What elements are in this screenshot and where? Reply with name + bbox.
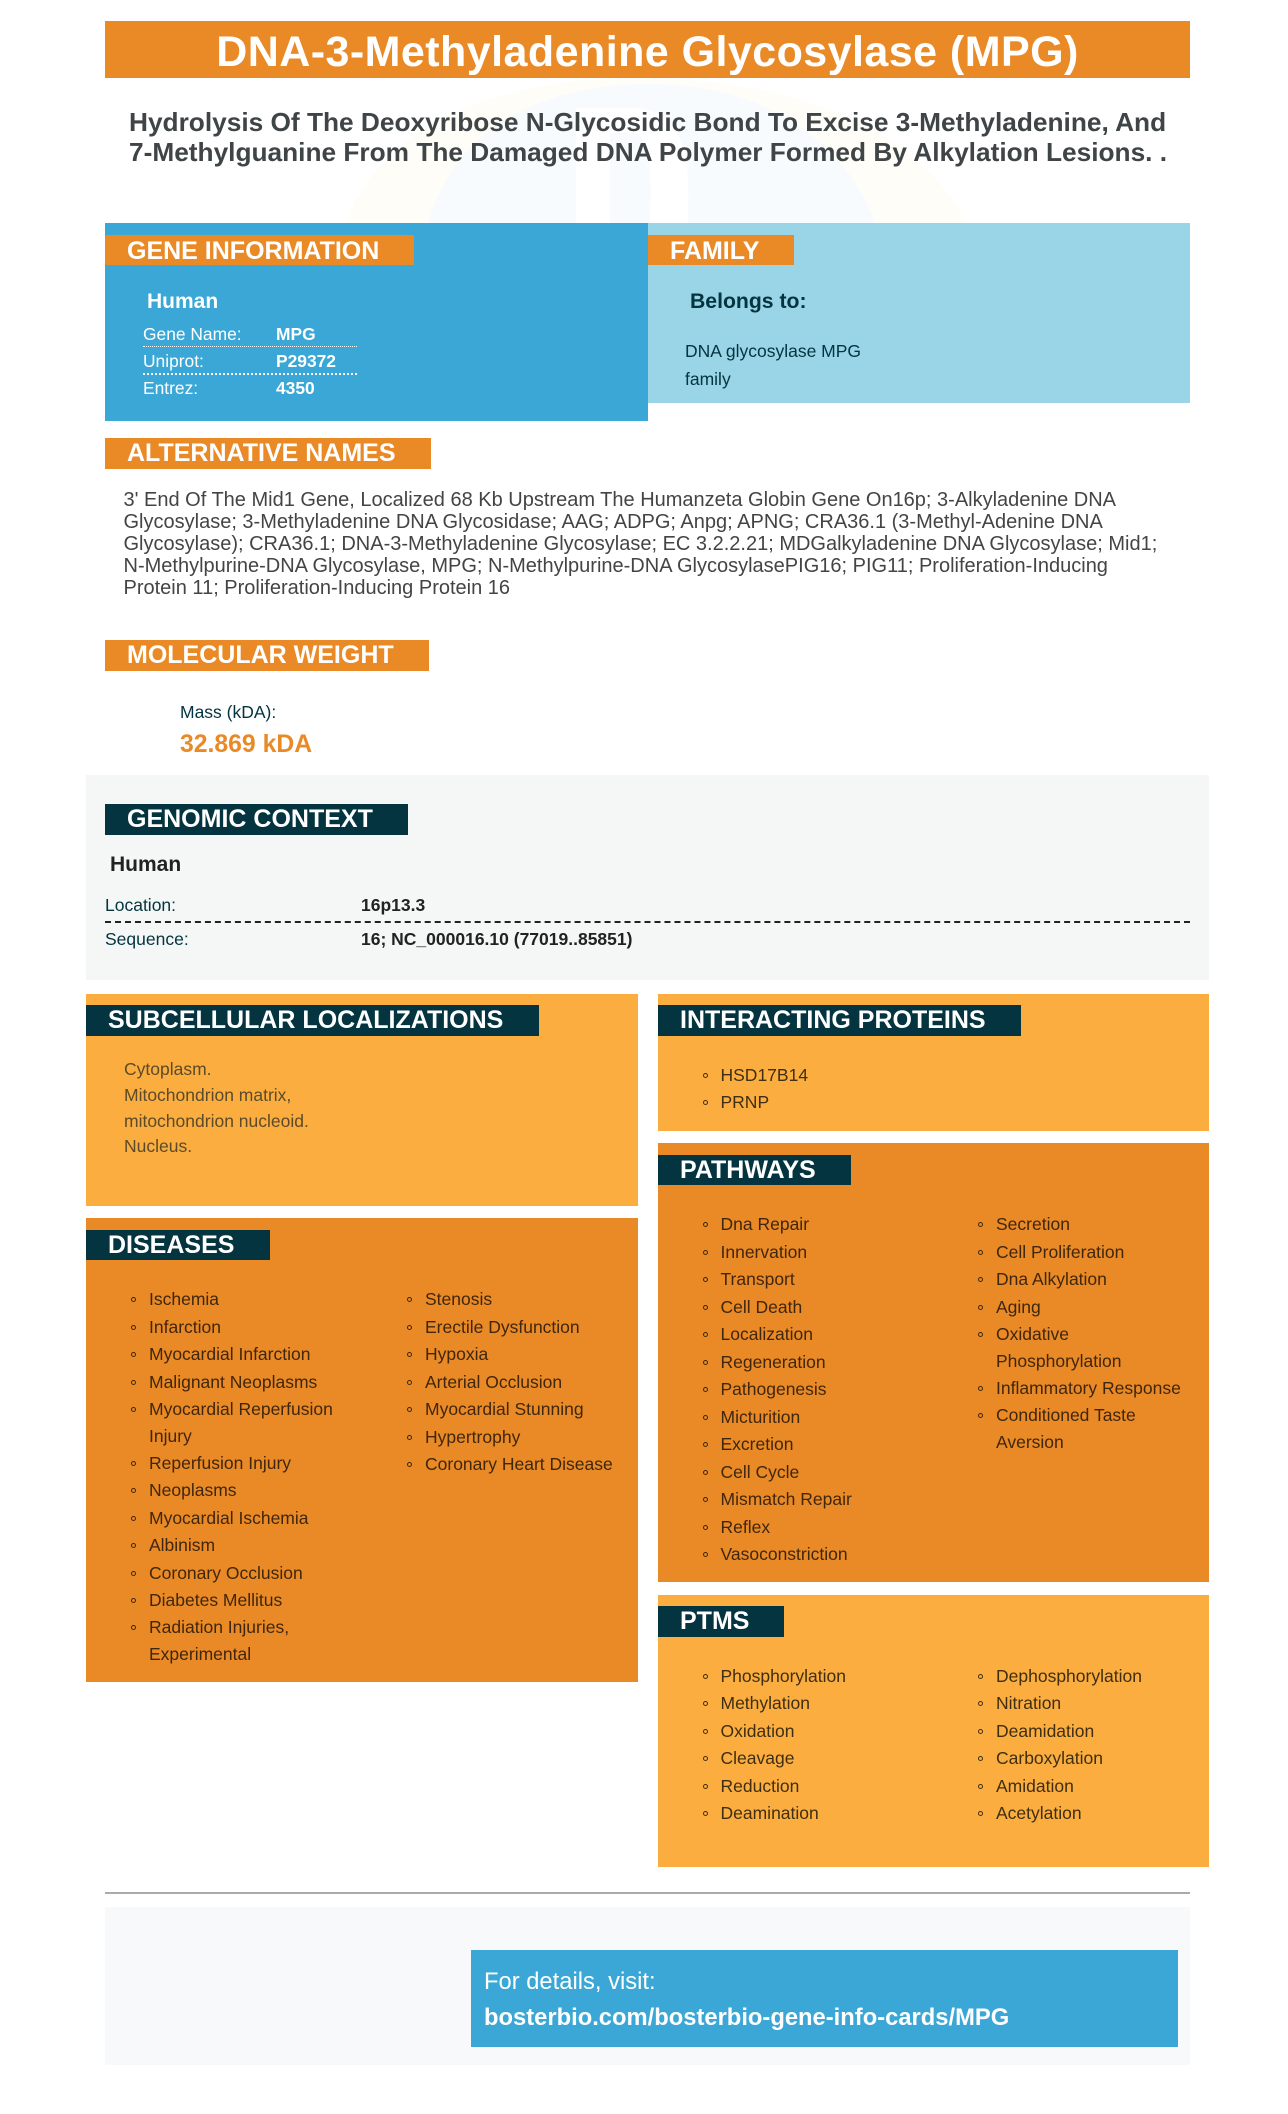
disease list: column 1: Experimental [149, 1644, 251, 1664]
disease list: column 1: Neoplasms [149, 1480, 237, 1500]
heading: interacting proteins: INTERACTING PROTEINS [680, 1006, 986, 1034]
disease list: column 1: Coronary Occlusion [149, 1563, 303, 1583]
entrez row: Entrez: [143, 378, 198, 398]
gene name row [143, 324, 316, 344]
entrez row [143, 378, 315, 398]
location row: Location: [105, 894, 176, 914]
disease list: column 1 [131, 1289, 333, 1664]
ptm list: column 2 [978, 1666, 1142, 1823]
pathway list: column 2 [978, 1214, 1181, 1452]
pathway list: column 2: Cell Proliferation [996, 1242, 1124, 1262]
panel: diseases [86, 1218, 638, 1682]
heading: subcellular localizations: SUBCELLULAR LOCALIZATIONS [108, 1006, 503, 1034]
heading: diseases: DISEASES [108, 1231, 234, 1259]
belongs to label: Belongs to: [690, 290, 807, 313]
disease list: column 2: Myocardial Stunning [425, 1399, 584, 1419]
ptm list: column 1: Methylation [720, 1693, 810, 1713]
species label: Human [110, 853, 181, 876]
pathway list: column 1: Dna Repair [720, 1214, 809, 1234]
heading: molecular weight: MOLECULAR WEIGHT [127, 641, 394, 669]
localization list: Cytoplasm. [124, 1059, 212, 1079]
ptm list: column 2: Dephosphorylation [996, 1666, 1142, 1686]
pathway list: column 1: Pathogenesis [720, 1379, 827, 1399]
ptm list: column 1: Phosphorylation [720, 1666, 846, 1686]
pathway list: column 1: Mismatch Repair [720, 1489, 852, 1509]
uniprot row: Uniprot: [143, 350, 204, 370]
ptm list: column 2: Acetylation [996, 1803, 1082, 1823]
pathway list: column 2: Phosphorylation [996, 1351, 1122, 1371]
subtitle: Hydrolysis Of The Deoxyribose N-Glycosidic Bond To Excise 3-Methyladenine, And [129, 107, 1166, 137]
pathway list: column 1: Innervation [720, 1242, 807, 1262]
ptm list: column 1: Cleavage [720, 1748, 794, 1768]
panel: genomic context [86, 775, 1209, 980]
mass label: Mass (kDA): [180, 702, 276, 722]
disease list: column 1: Ischemia [149, 1289, 219, 1309]
disease list: column 1: Albinism [149, 1535, 215, 1555]
subtitle: 7-Methylguanine From The Damaged DNA Polymer Formed By Alkylation Lesions. . [129, 136, 1167, 166]
localization list: Nucleus. [124, 1136, 192, 1156]
pathway list: column 1: Reflex [720, 1517, 770, 1537]
panel: pathways [658, 1143, 1209, 1582]
background watermark [320, 78, 1000, 223]
disease list: column 1: Myocardial Ischemia [149, 1508, 308, 1528]
pathway list: column 2: Aversion [996, 1432, 1064, 1452]
heading: gene information: GENE INFORMATION [127, 237, 379, 265]
heading: family: FAMILY [670, 237, 759, 265]
heading: ptms: PTMS [680, 1607, 749, 1635]
pathway list: column 2: Oxidative [996, 1324, 1069, 1344]
sequence row: 16; NC_000016.10 (77019..85851) [361, 929, 632, 949]
pathway list: column 1: Localization [720, 1324, 813, 1344]
sequence row [105, 929, 632, 949]
family text: DNA glycosylase MPG [685, 341, 861, 361]
callout label: For details, visit: [484, 1968, 656, 1995]
family text: family [685, 369, 731, 389]
disease list: column 2 [407, 1289, 613, 1474]
pathway list: column 2: Secretion [996, 1214, 1070, 1234]
pathway list: column 1: Cell Cycle [720, 1462, 799, 1482]
ptm list: column 1: Oxidation [720, 1721, 794, 1741]
disease list: column 1: Infarction [149, 1317, 221, 1337]
protein list: PRNP [720, 1092, 769, 1112]
localization list: Mitochondrion matrix, [124, 1085, 291, 1105]
ptm list: column 1 [703, 1666, 846, 1823]
localization list: mitochondrion nucleoid. [124, 1111, 309, 1131]
alternative names text: Glycosylase); CRA36.1; DNA-3-Methyladenine Glycosylase; EC 3.2.2.21; MDGalkyladenine DNA Glycosylase; Mid1; [124, 533, 1157, 555]
disease list: column 1: Myocardial Reperfusion [149, 1399, 333, 1419]
protein list [703, 1065, 808, 1112]
pathway list: column 1: Micturition [720, 1407, 800, 1427]
disease list: column 2: Coronary Heart Disease [425, 1454, 613, 1474]
title: DNA-3-Methyladenine Glycosylase (MPG) [216, 28, 1079, 76]
panel: subcellular localizations [86, 994, 638, 1206]
uniprot row [143, 350, 336, 370]
pathway list: column 1 [703, 1214, 852, 1564]
uniprot row: P29372 [276, 350, 336, 370]
disease list: column 1: Reperfusion Injury [149, 1453, 291, 1473]
panel: interacting proteins [658, 994, 1209, 1131]
pathway list: column 1: Regeneration [720, 1352, 826, 1372]
alternative names text: 3' End Of The Mid1 Gene, Localized 68 Kb Upstream The Humanzeta Globin Gene On16p; 3-Alkyladenine DNA [124, 489, 1116, 511]
localization list [124, 1059, 309, 1156]
ptm list: column 2: Nitration [996, 1693, 1061, 1713]
pathway list: column 2: Dna Alkylation [996, 1269, 1107, 1289]
location row: 16p13.3 [361, 894, 425, 914]
sequence row: Sequence: [105, 929, 189, 949]
pathway list: column 2: Inflammatory Response [996, 1378, 1181, 1398]
panel: family [648, 223, 1190, 403]
disease list: column 1: Injury [149, 1426, 192, 1446]
protein list: HSD17B14 [720, 1065, 808, 1085]
heading: family [648, 235, 794, 265]
location row [105, 894, 425, 914]
heading: genomic context: GENOMIC CONTEXT [127, 805, 373, 833]
footer panel [105, 1907, 1190, 2065]
ptm list: column 2: Carboxylation [996, 1748, 1103, 1768]
heading: pathways [658, 1155, 851, 1185]
panel: gene information [105, 223, 648, 421]
title [105, 21, 1190, 78]
disease list: column 1: Radiation Injuries, [149, 1617, 289, 1637]
disease list: column 2: Stenosis [425, 1289, 492, 1309]
disease list: column 2: Hypertrophy [425, 1427, 520, 1447]
alternative names text: N-Methylpurine-DNA Glycosylase, MPG; N-Methylpurine-DNA GlycosylasePIG16; PIG11; Proliferation-Inducing [124, 555, 1108, 577]
heading: alternative names: ALTERNATIVE NAMES [127, 439, 396, 467]
pathway list: column 1: Excretion [720, 1434, 793, 1454]
ptm list: column 1: Deamination [720, 1803, 819, 1823]
disease list: column 1: Myocardial Infarction [149, 1344, 310, 1364]
disease list: column 2: Arterial Occlusion [425, 1372, 562, 1392]
pathway list: column 1: Transport [720, 1269, 795, 1289]
ptm list: column 2: Amidation [996, 1776, 1074, 1796]
pathway list: column 1: Cell Death [720, 1297, 802, 1317]
disease list: column 1: Malignant Neoplasms [149, 1372, 317, 1392]
callout: details link [471, 1950, 1178, 2047]
entrez row: 4350 [276, 378, 315, 398]
panel: ptms [658, 1595, 1209, 1867]
family text [685, 341, 861, 389]
disease list: column 2: Hypoxia [425, 1344, 488, 1364]
pathway list: column 1: Vasoconstriction [720, 1544, 848, 1564]
heading: ptms [658, 1606, 784, 1637]
gene name row: MPG [276, 324, 316, 344]
heading: pathways: PATHWAYS [680, 1156, 816, 1184]
species label: Human [147, 290, 218, 313]
heading: diseases [86, 1230, 270, 1260]
disease list: column 2: Erectile Dysfunction [425, 1317, 580, 1337]
subtitle [129, 107, 1167, 166]
pathway list: column 2: Conditioned Taste [996, 1405, 1136, 1425]
callout url: bosterbio.com/bosterbio-gene-info-cards/MPG [484, 2004, 1009, 2031]
pathway list: column 2: Aging [996, 1297, 1041, 1317]
alternative names text: Glycosylase; 3-Methyladenine DNA Glycosidase; AAG; ADPG; Anpg; APNG; CRA36.1 (3-Methyl-Adenine DNA [124, 511, 1103, 533]
ptm list: column 1: Reduction [720, 1776, 799, 1796]
gene name row: Gene Name: [143, 324, 242, 344]
mass value: 32.869 kDA [180, 731, 312, 758]
alternative names text [124, 489, 1157, 599]
alternative names text: Protein 11; Proliferation-Inducing Protein 16 [124, 577, 510, 599]
disease list: column 1: Diabetes Mellitus [149, 1590, 282, 1610]
ptm list: column 2: Deamidation [996, 1721, 1094, 1741]
